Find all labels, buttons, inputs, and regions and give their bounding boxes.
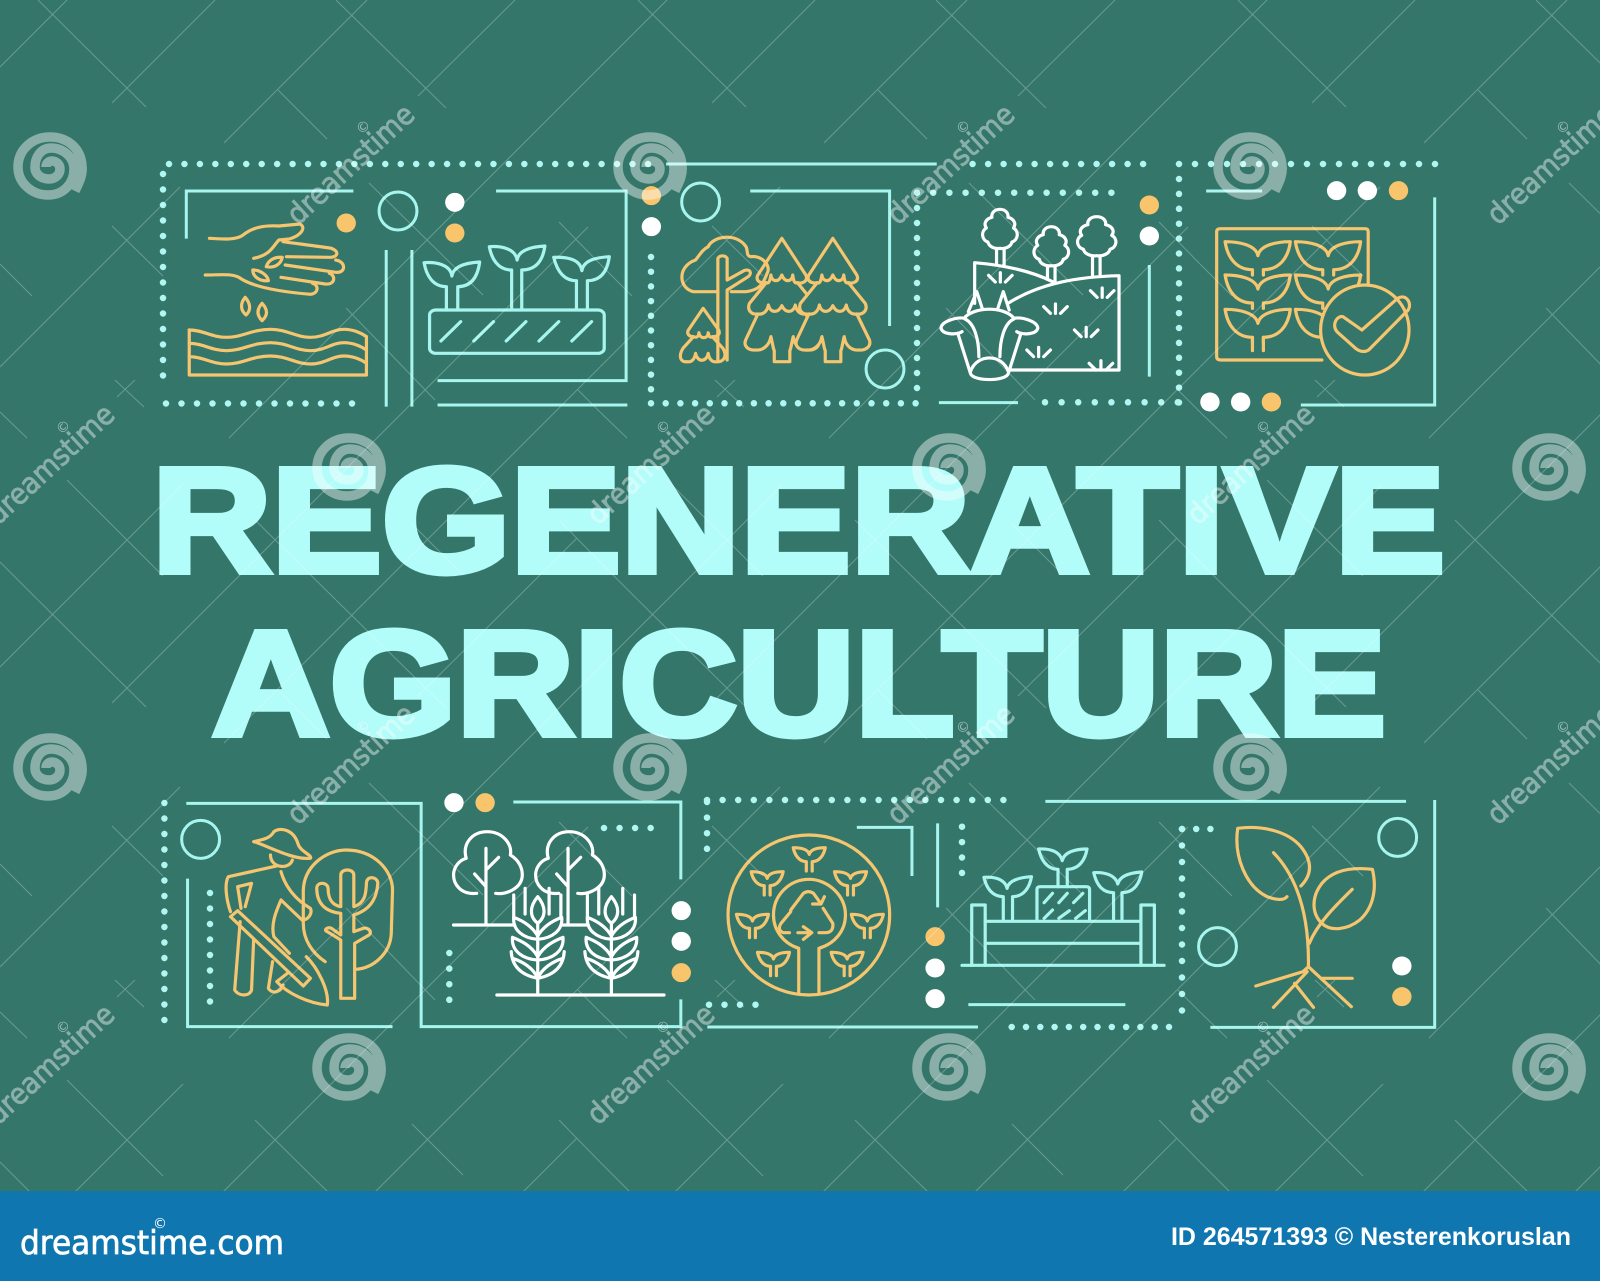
dotted frames bbox=[163, 164, 1436, 1027]
frame lines: recycling, crate and plant panels bbox=[857, 800, 1435, 1027]
second pine tree bbox=[796, 238, 870, 362]
icon: trees and wheat bbox=[454, 832, 664, 995]
top row panels bbox=[186, 164, 937, 407]
footer logo: dreamstime.com bbox=[20, 1223, 284, 1262]
watermark text: dreamstime bbox=[280, 697, 421, 831]
watermark text: © bbox=[1253, 417, 1274, 438]
title bbox=[152, 437, 1445, 767]
watermark text: © bbox=[53, 417, 74, 438]
watermark text: © bbox=[1553, 717, 1574, 738]
title: AGRICULTURE bbox=[212, 600, 1386, 767]
watermark text: dreamstime bbox=[580, 997, 721, 1131]
icon: farmer with shovel and cactus tree bbox=[226, 829, 393, 1005]
icon: crop field with check mark bbox=[1217, 229, 1410, 375]
watermark text: © bbox=[1553, 117, 1574, 138]
frame lines: farmer and forest panels bbox=[182, 793, 978, 1027]
watermark text: dreamstime bbox=[1180, 997, 1321, 1131]
footer credit: ID 264571393 © Nesterenkoruslan bbox=[1171, 1223, 1571, 1251]
icon: young plant with roots bbox=[1237, 827, 1374, 1007]
watermark text: © bbox=[1253, 1017, 1274, 1038]
footer banner bbox=[0, 1191, 1600, 1281]
watermark text: dreamstime bbox=[880, 97, 1021, 231]
watermark text: © bbox=[653, 1017, 674, 1038]
frame lines: hand and seedling panels bbox=[186, 164, 937, 407]
title: REGENERATIVE bbox=[152, 437, 1445, 604]
watermark text: © bbox=[353, 117, 374, 138]
watermark text: dreamstime bbox=[1180, 397, 1321, 531]
icon: seedling tray bbox=[424, 246, 609, 353]
icon: sprouts in raised crate bbox=[962, 849, 1164, 965]
icon: circular recycling tree bbox=[728, 835, 890, 995]
icon: cow on pasture bbox=[941, 209, 1119, 380]
watermark text: © bbox=[653, 417, 674, 438]
watermark text: © bbox=[53, 1017, 74, 1038]
bottom row panels bbox=[182, 793, 978, 1027]
watermark spirals bbox=[18, 137, 1581, 1096]
watermark text: © bbox=[953, 717, 974, 738]
watermark text: dreamstime bbox=[580, 397, 721, 531]
frame lines: pasture and crop panels bbox=[866, 181, 1435, 411]
watermark text: © bbox=[953, 117, 974, 138]
footer logo: © bbox=[153, 1216, 167, 1232]
watermark text: © bbox=[353, 717, 374, 738]
watermark text: dreamstime bbox=[280, 97, 421, 231]
icon: hand sowing seeds bbox=[189, 224, 366, 375]
watermark text: dreamstime bbox=[880, 697, 1021, 831]
icon: trees bbox=[680, 237, 819, 362]
